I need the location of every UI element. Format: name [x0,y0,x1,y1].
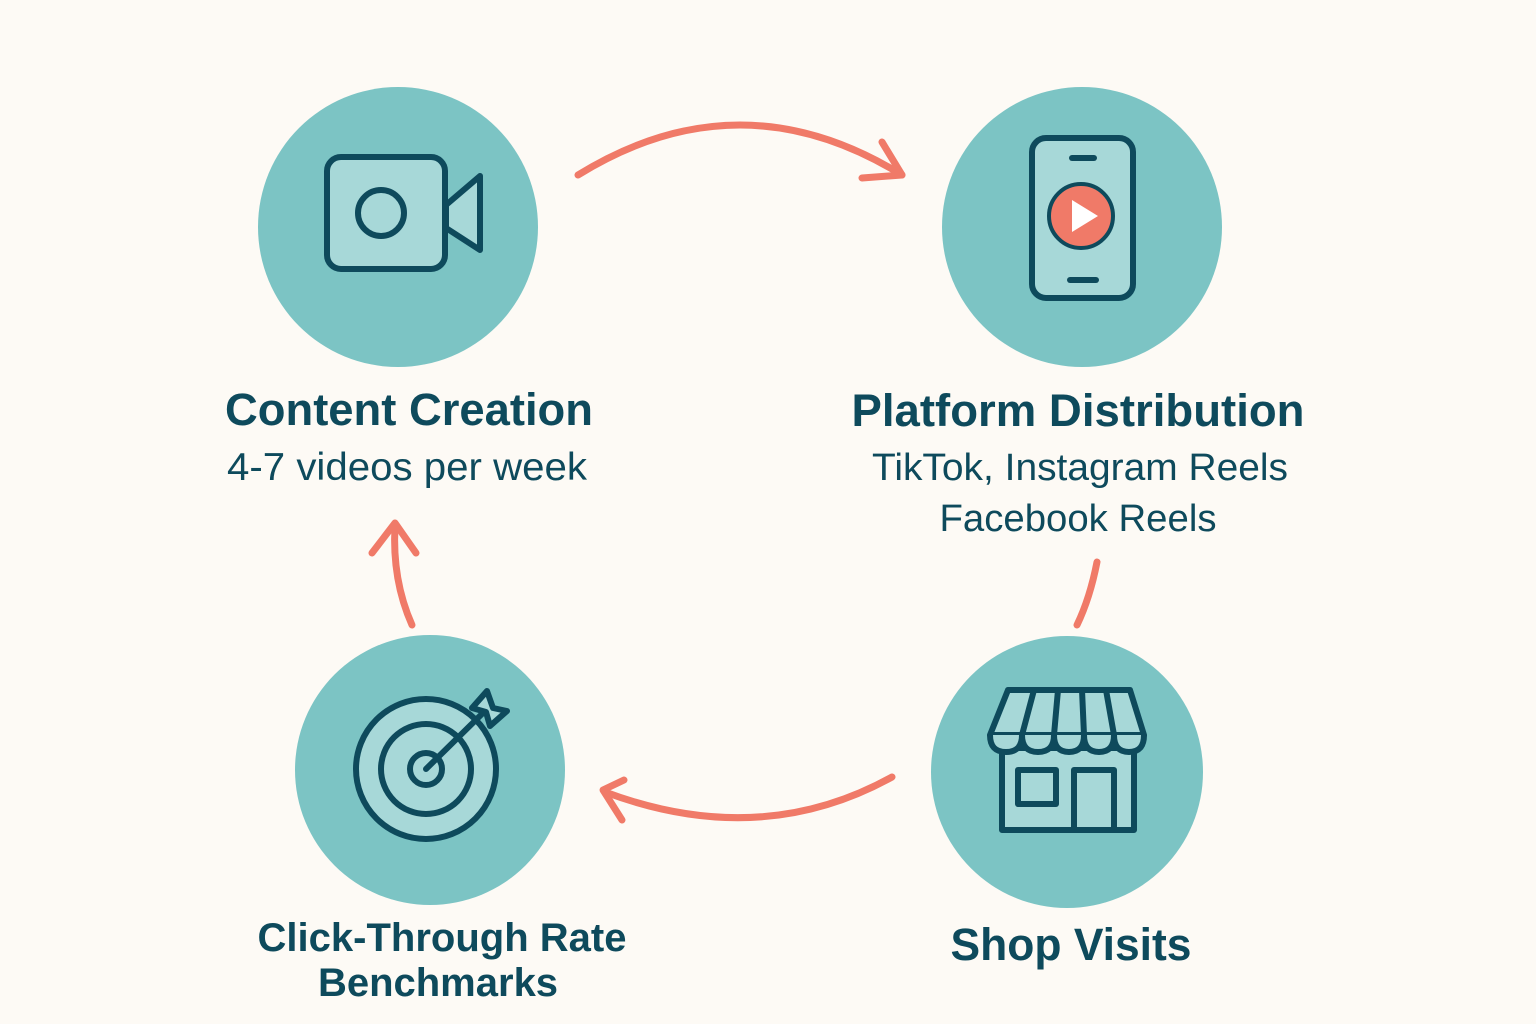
heading: content creation: Content Creation [225,384,593,435]
circle: content creation [258,87,538,367]
circle: platform [942,87,1222,367]
circle: shop [931,636,1203,908]
circle: ctr [295,635,565,905]
icon: phone with play [1032,138,1133,298]
step: click-through rate: Benchmarks [318,961,558,1005]
step: platform distribution: Facebook Reels [940,498,1216,540]
icon: storefront [990,690,1144,830]
step: content creation [225,87,593,489]
arrow: distribution to shop [1077,562,1097,625]
step: shop visits [931,636,1203,970]
heading: ctr benchmarks: Click-Through Rate [258,916,626,960]
text: videos per week: 4-7 videos per week [227,446,588,489]
arrow: ctr to creation [372,523,416,625]
text: platforms: TikTok, Instagram Reels [872,447,1288,489]
icon: video camera [327,157,480,269]
icon: target [356,691,507,839]
step: click-through rate [258,635,626,1005]
arrow: creation to distribution [578,125,902,178]
heading: shop visits: Shop Visits [950,919,1192,970]
heading: platform distribution: Platform Distribution [852,385,1304,436]
step: platform distribution [852,87,1304,540]
arrow: shop to ctr [603,777,892,820]
